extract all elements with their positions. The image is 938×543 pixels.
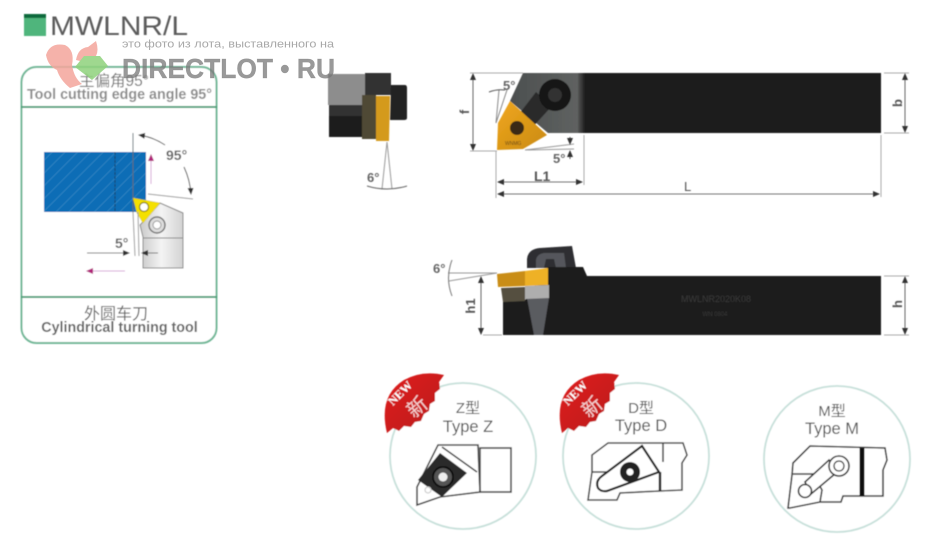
label: Type M bbox=[805, 420, 859, 438]
dimension 5 degrees lower: 5° bbox=[553, 151, 565, 166]
panel caption: Cylindrical turning tool bbox=[41, 320, 198, 336]
panel: tool cutting edge angle bbox=[21, 67, 217, 343]
heading: model name: MWLNR/L bbox=[50, 11, 188, 41]
panel caption bbox=[41, 305, 198, 336]
turning tool holder with insert bbox=[133, 198, 183, 268]
label: Type D bbox=[615, 417, 667, 435]
watermark: brand name: DIRECTLOT • RU bbox=[122, 53, 335, 84]
clamp drawing bbox=[788, 446, 887, 508]
end view of tool bbox=[328, 73, 407, 189]
dimension b: b bbox=[890, 99, 905, 107]
shank body bbox=[503, 267, 881, 335]
insert bbox=[497, 268, 549, 302]
dimension 6 degrees: 6° bbox=[433, 261, 445, 276]
angle dimension 95 degrees bbox=[139, 135, 193, 199]
panel heading: Tool cutting edge angle 95° bbox=[27, 87, 212, 103]
engraved model text: WN 0804 bbox=[702, 312, 728, 318]
angle dimension 5 degrees: 5° bbox=[115, 235, 128, 251]
label: Type Z bbox=[443, 418, 493, 436]
arrow: feed upward bbox=[150, 155, 152, 184]
engraved model text: MWLNR2020K08 bbox=[681, 294, 751, 304]
badge: new: NEW bbox=[560, 378, 590, 408]
badge: new: NEW bbox=[385, 378, 415, 408]
circle: Type M bbox=[764, 386, 910, 532]
badge: new: 新 bbox=[577, 392, 607, 423]
angle dimension 95 degrees: 95° bbox=[166, 147, 187, 163]
angle dimension 5 degrees bbox=[87, 212, 158, 256]
dimension 5 degrees lower bbox=[525, 137, 574, 166]
dimension b bbox=[884, 73, 909, 133]
dimension L: L bbox=[684, 179, 691, 194]
arrow: feed leftward bbox=[87, 270, 125, 272]
panel heading: 主偏角95° bbox=[79, 72, 149, 90]
insert: WNMG bbox=[505, 141, 521, 147]
label: D型 bbox=[628, 400, 654, 417]
circle: Type D bbox=[560, 373, 709, 529]
workpiece: blue block bbox=[44, 133, 146, 212]
watermark: caption: это фото из лота, выставленного на bbox=[122, 38, 335, 50]
badge: new bbox=[385, 373, 444, 433]
panel heading bbox=[27, 72, 212, 103]
side view of tool bbox=[433, 246, 909, 335]
label bbox=[443, 400, 493, 436]
dimension 5 degrees upper: 5° bbox=[503, 78, 515, 93]
dimension f: f bbox=[457, 109, 472, 114]
clamp bbox=[527, 246, 576, 270]
dimension L1 bbox=[496, 135, 584, 198]
dimension 6 degrees bbox=[433, 260, 497, 296]
gray wedge bbox=[527, 298, 549, 335]
label: Z型 bbox=[456, 400, 480, 417]
tool head bbox=[510, 73, 578, 133]
label bbox=[805, 403, 859, 438]
shank bar bbox=[586, 73, 881, 133]
clamp drawing bbox=[417, 445, 511, 505]
clamp bbox=[516, 79, 571, 130]
engraved model text bbox=[681, 294, 751, 318]
top view of tool bbox=[457, 73, 909, 198]
circle: Type Z bbox=[385, 373, 536, 529]
insert bbox=[497, 101, 547, 150]
dimension: 6 degrees: 6° bbox=[367, 170, 379, 185]
watermark: squirrel logo bbox=[46, 41, 108, 88]
label: M型 bbox=[818, 403, 846, 420]
badge: new bbox=[560, 373, 619, 433]
dimension h1 bbox=[463, 277, 502, 335]
dimension h: h bbox=[890, 300, 905, 308]
dimension h1: h1 bbox=[463, 298, 478, 314]
dimension f bbox=[457, 73, 523, 151]
clamp drawing bbox=[588, 443, 687, 500]
dimension L1: L1 bbox=[534, 168, 551, 184]
dimension 5 degrees upper bbox=[489, 78, 515, 123]
dimension h bbox=[884, 276, 909, 335]
label bbox=[615, 400, 667, 435]
badge: new: 新 bbox=[402, 392, 432, 423]
panel caption: 外圆车刀 bbox=[84, 305, 148, 323]
